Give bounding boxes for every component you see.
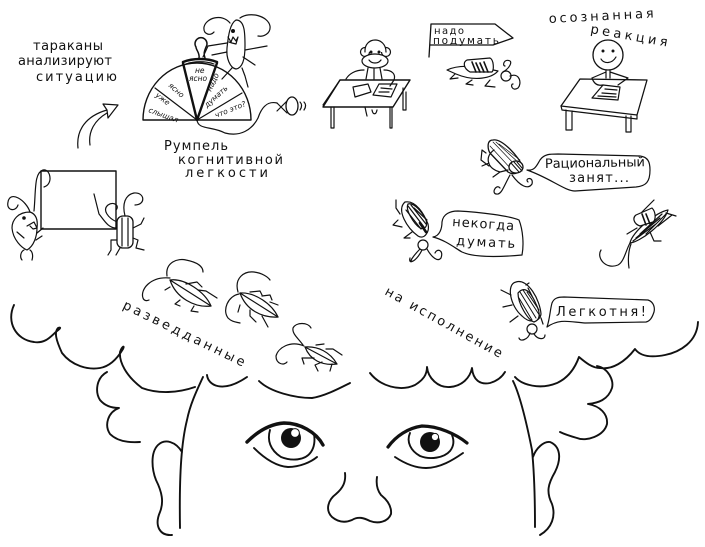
wheel sector labels: слышал xyxy=(147,105,180,125)
sign: need to think: надо xyxy=(434,26,464,37)
hair: fringe xyxy=(11,305,698,398)
icon: cockroach scout three xyxy=(276,324,342,371)
wheel sector labels xyxy=(147,66,247,125)
eye: right xyxy=(388,426,467,468)
label: for execution: на исполнение xyxy=(382,284,505,361)
icon: cable and horn attached to wheel xyxy=(197,97,306,134)
caption: helm of cognitive ease: легкости xyxy=(185,166,268,181)
label: reconnaissance data: разведданные xyxy=(120,298,247,370)
hair: right curls xyxy=(560,366,612,439)
icon: cockroach scout two xyxy=(226,272,278,327)
wheel sector labels: не xyxy=(195,66,205,75)
icon: roach with no time xyxy=(393,200,442,262)
arrow: from board to wheel xyxy=(78,104,118,148)
wheel sector labels: ясно xyxy=(189,74,208,83)
character face: hair, eyes, nose xyxy=(11,305,698,535)
speech bubble: no time to think: некогда xyxy=(452,215,515,234)
icon: fanged cockroach at the wheel xyxy=(203,15,270,87)
caption: cockroaches analyse the situation: ситуацию xyxy=(36,70,117,85)
speech bubble: rational is busy: занят... xyxy=(569,171,629,186)
icon: stick figure at table xyxy=(561,40,647,132)
caption: conscious reaction xyxy=(548,7,669,50)
sign: need to think xyxy=(429,24,513,57)
hair: left curls xyxy=(97,372,140,442)
caption: conscious reaction: реакция xyxy=(589,22,669,50)
speech bubble: rational is busy xyxy=(527,154,650,191)
eye: left xyxy=(247,423,323,467)
speech bubble: rational is busy: Рациональный xyxy=(545,155,645,172)
caption: cockroaches analyse the situation: тараканы xyxy=(33,39,103,54)
speech bubble: no time to think xyxy=(433,211,523,257)
icon: cockroach pair holding the board xyxy=(8,170,144,260)
wheel sector labels: уже xyxy=(153,90,172,108)
wheel sector labels: думать xyxy=(202,84,230,110)
wheel sector labels: надо xyxy=(205,71,221,93)
nose xyxy=(328,473,391,522)
speech bubble: easy stuff xyxy=(547,297,654,327)
wheel sector labels: что это? xyxy=(213,99,247,120)
icon: roach under sign xyxy=(447,58,520,89)
icon: cockroach scout one xyxy=(142,260,217,312)
caption: helm of cognitive ease xyxy=(164,139,283,181)
wheel: helm of cognitive ease xyxy=(143,38,251,125)
face: left contour and ear xyxy=(152,377,203,535)
caption: cockroaches analyse the situation: анализируют xyxy=(18,54,112,69)
wheel sector labels: ясно xyxy=(167,81,186,100)
speech bubble: easy stuff: Легкотня! xyxy=(556,305,646,320)
caption: conscious reaction: осознанная xyxy=(548,7,654,27)
caption: helm of cognitive ease: Румпель xyxy=(164,139,228,154)
caption: helm of cognitive ease: когнитивной xyxy=(178,153,283,168)
face: right contour and ear xyxy=(513,381,559,535)
sign: need to think: подумать xyxy=(433,35,499,47)
speech bubble: no time to think: думать xyxy=(456,234,515,252)
icon: cockroach on its side xyxy=(600,200,676,268)
icon: rational cockroach xyxy=(481,140,532,194)
icon: monkey at desk xyxy=(323,40,410,128)
caption: cockroaches analyse the situation xyxy=(18,39,117,85)
icon: easy-going roach xyxy=(501,282,545,340)
